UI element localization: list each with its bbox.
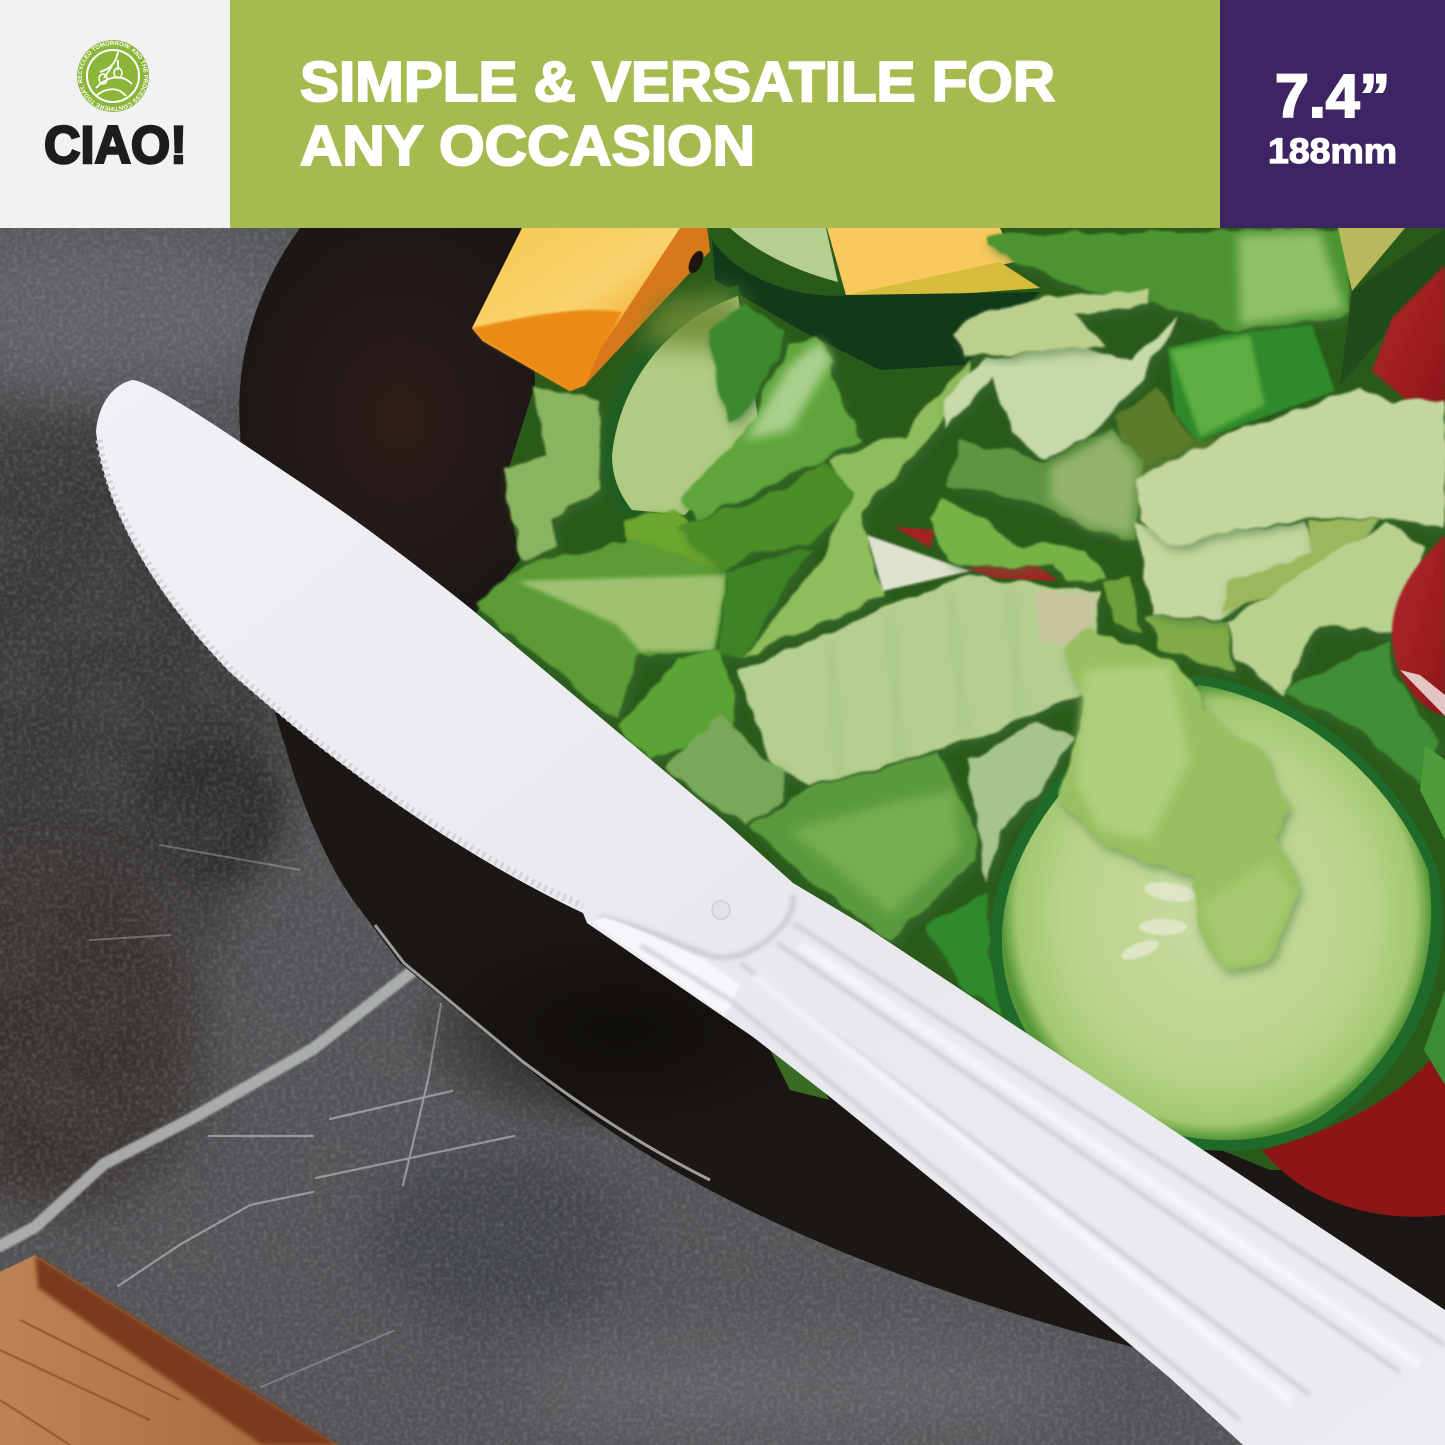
wooden board bbox=[0, 1255, 338, 1445]
marble veins bbox=[0, 845, 514, 1387]
header: logo panel bbox=[0, 0, 230, 228]
orange wedge bbox=[472, 228, 710, 391]
header: title banner bbox=[230, 0, 1220, 228]
lettuce top right bbox=[988, 228, 1352, 331]
plate rim highlight bbox=[375, 925, 710, 1180]
logo wordmark: CIAO! bbox=[44, 116, 187, 175]
lettuce right big bbox=[1145, 615, 1232, 671]
title text bbox=[300, 50, 1055, 178]
lettuce centre bbox=[1112, 388, 1195, 468]
black plate bbox=[230, 210, 1445, 1445]
lettuce over cucumber bbox=[1060, 628, 1300, 970]
tomato right bbox=[1392, 535, 1445, 716]
serrated edge bbox=[99, 440, 583, 906]
handle ribs bbox=[640, 923, 1445, 1420]
title text: SIMPLE & VERSATILE FOR bbox=[300, 50, 1055, 114]
knife flange bbox=[592, 917, 740, 1016]
header: size badge bbox=[1220, 0, 1445, 228]
lettuce left cluster bbox=[505, 385, 600, 561]
green pepper bbox=[1168, 325, 1335, 441]
tomato upper right bbox=[1372, 265, 1445, 405]
collar dimple bbox=[712, 901, 730, 919]
header: size badge: 7.4” bbox=[1275, 62, 1390, 130]
logo badge bbox=[77, 40, 149, 112]
title text: ANY OCCASION bbox=[300, 114, 755, 178]
orange slice top bbox=[827, 228, 1015, 295]
knife collar bbox=[600, 895, 793, 957]
salad bbox=[470, 228, 1445, 1217]
lettuce lower bbox=[665, 715, 785, 825]
cucumber left bbox=[600, 285, 760, 520]
knife blade and handle bbox=[96, 380, 1445, 1445]
cucumber top dark skin bbox=[712, 240, 1040, 370]
tomato bottom right bbox=[1262, 1058, 1445, 1217]
header: size badge: 188mm bbox=[1268, 132, 1397, 171]
cucumber seeds bbox=[1119, 879, 1197, 963]
dark salad base bbox=[470, 228, 1445, 1170]
cucumber slice big bbox=[990, 675, 1443, 1151]
pale lettuce stem bbox=[738, 575, 1142, 788]
plastic knife bbox=[96, 380, 1445, 1445]
handle highlights bbox=[755, 945, 1420, 1400]
